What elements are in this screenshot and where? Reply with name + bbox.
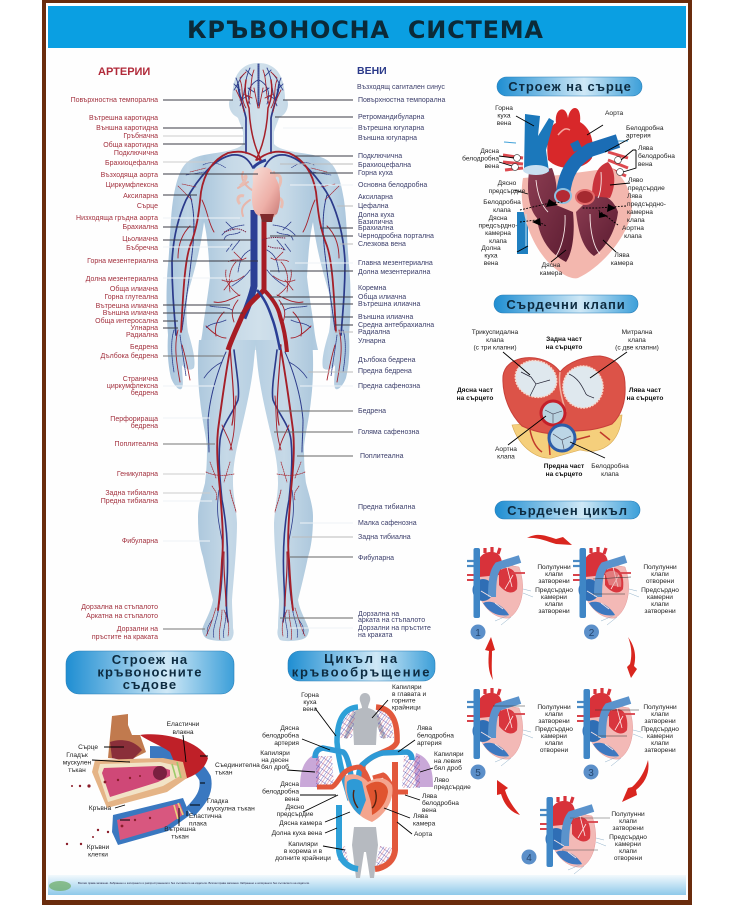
vein labels: Аксиларна [358, 194, 393, 201]
vein labels: Брахиоцефална [358, 162, 411, 169]
vein labels: Коремна [358, 285, 386, 292]
vein labels: Цефална [358, 203, 389, 210]
heading pill: Строеж на [112, 652, 188, 667]
vessel labels: Гладък [66, 752, 88, 759]
heart labels: Дясна [480, 148, 499, 155]
heart labels: белодробна [638, 152, 675, 160]
heart labels: Лява [614, 252, 630, 259]
vessel labels: Съединителна [215, 762, 260, 769]
artery labels: Обща илиачна [110, 285, 158, 293]
pulmonary veins [317, 767, 370, 787]
heart labels: Дясна [489, 215, 508, 222]
cycle labels: клапи [651, 740, 669, 747]
artery labels: Низходяща гръдна аорта [76, 215, 158, 222]
heart labels: предсърдие [628, 185, 665, 192]
heart labels: камера [611, 260, 633, 267]
circulation labels: предсърдие [434, 784, 471, 791]
valves labels: Митрална [622, 329, 653, 336]
valves labels: Дясна част [457, 387, 494, 394]
vessel labels: Гладка [207, 798, 229, 805]
artery labels: Аркатна на стъпалото [86, 613, 158, 620]
vein labels: Бедрена [358, 408, 386, 415]
heart labels: куха [484, 252, 498, 260]
vein labels: Голяма сафенозна [358, 429, 419, 436]
callout lines [287, 700, 433, 850]
heart labels: куха [497, 112, 511, 120]
vein labels: Долна мезентериална [358, 269, 430, 276]
callout lines [92, 735, 208, 826]
vein labels: Дорзални на пръстите [358, 625, 431, 632]
callout lines [499, 116, 636, 262]
heart cross-section [503, 108, 632, 278]
circulation labels: артерия [274, 740, 299, 747]
title band [48, 6, 686, 48]
lower figure [352, 827, 378, 878]
heading pill [288, 651, 435, 681]
cycle labels: отворени [646, 578, 674, 585]
heading pill [66, 651, 234, 694]
vein labels: Външна югуларна [358, 135, 417, 142]
artery labels: Бъбречна [126, 244, 158, 252]
artery labels: Брахиална [122, 224, 158, 231]
cycle labels: камерни [541, 594, 567, 601]
heart labels: Белодробна [626, 124, 664, 132]
cycle labels: Предсърдно [609, 834, 647, 841]
circulation labels: вена [422, 807, 437, 814]
vein labels: Предна тибиална [358, 503, 415, 511]
human body figure [163, 63, 353, 641]
cycle labels: клапи [545, 740, 563, 747]
artery labels: Циркумфлексна [106, 182, 158, 189]
heart in body [238, 167, 282, 222]
cycle labels: клапи [545, 601, 563, 608]
valves labels: Белодробна [591, 462, 629, 470]
heart labels: предсърдие [489, 188, 526, 195]
heart labels: клапа [624, 233, 642, 240]
vein labels: Главна мезентериална [358, 260, 433, 267]
vessel labels: плака [189, 820, 207, 828]
vessel labels: Вътрешна [164, 826, 196, 833]
stage numbers [470, 624, 599, 864]
cycle labels: затворени [612, 825, 644, 832]
artery labels: Външна каротидна [96, 125, 158, 132]
vein labels: Възходящ сагитален синус [357, 84, 445, 91]
vein labels: Основна белодробна [358, 181, 427, 189]
heart stage 3 [577, 688, 643, 766]
heart labels: клапа [489, 238, 507, 245]
vein labels: Предна бедрена [358, 367, 412, 375]
vein labels: Дълбока бедрена [358, 356, 416, 364]
cycle labels: клапи [651, 571, 669, 578]
circulation labels: Капиляри [260, 750, 290, 757]
artery labels: Аксиларна [123, 193, 158, 200]
artery labels: Перфорираща [110, 416, 158, 423]
vessel labels: мускулен [63, 760, 92, 766]
capillary meshes [338, 708, 356, 738]
heart labels: Белодробна [483, 198, 521, 206]
artery labels: Предна тибиална [101, 497, 158, 505]
panel: blood vessel structure [63, 651, 260, 858]
heart labels: Аорта [605, 110, 624, 117]
cycle labels: клапи [619, 818, 637, 825]
cycle labels: Полулунни [643, 704, 677, 711]
panel: heart structure [462, 77, 675, 278]
cycle labels: Полулунни [537, 564, 571, 571]
valves labels: на сърцето [546, 471, 582, 478]
cycle labels: клапи [651, 711, 669, 718]
circulation labels: в корема и в [284, 848, 323, 855]
vessels: upper body [172, 64, 345, 382]
vessel labels [63, 721, 260, 858]
vein labels: Обща илиачна [358, 293, 406, 301]
heart labels [462, 105, 675, 277]
cycle labels: затворени [538, 608, 570, 615]
heart stage 1 [467, 547, 533, 625]
circulation diagram [300, 693, 433, 878]
heading pill [497, 77, 642, 96]
artery labels [71, 97, 158, 641]
circulation labels: Капиляри [392, 684, 422, 691]
valves labels: клапа [601, 471, 619, 478]
artery labels: Дорзални на [117, 626, 158, 633]
cycle labels: отворени [540, 747, 568, 754]
circulation labels: вена [303, 706, 318, 713]
inferior vena cava and aorta [224, 160, 287, 352]
circulation labels: белодробна [417, 732, 454, 740]
valves drawing [503, 355, 625, 458]
cycle labels: клапи [651, 601, 669, 608]
artery labels: циркумфлексна [107, 383, 158, 390]
circulation labels: Лява [422, 793, 437, 800]
artery labels: пръстите на краката [92, 634, 158, 641]
heart [344, 774, 393, 822]
stage numbers: 3 [588, 768, 594, 779]
vein labels: Подключична [358, 153, 402, 160]
vein labels: Задна тибиална [358, 533, 411, 541]
circulation labels: Лява [417, 725, 432, 732]
artery labels: Вътрешна илиачна [96, 303, 158, 310]
heart labels: предсърдно- [479, 223, 517, 230]
vein labels: Ретромандибуларна [358, 113, 425, 121]
artery labels: Геникуларна [117, 471, 158, 478]
artery labels: Фибуларна [122, 537, 158, 545]
valves labels: Задна част [546, 336, 583, 343]
heading pill: кръвообръщение [292, 664, 431, 680]
vessel labels: клетки [88, 852, 108, 858]
cycle labels: камерни [647, 594, 673, 601]
heart labels: Долна [481, 245, 501, 252]
valves labels: на сърцето [457, 395, 493, 402]
heart labels: Ляво [628, 177, 643, 184]
artery labels: Дорзална на стъпалото [81, 604, 158, 611]
artery labels: Дълбока бедрена [101, 352, 158, 360]
cycle labels: затворени [538, 718, 570, 725]
stage numbers: 4 [526, 853, 532, 864]
cycle labels: камерни [541, 733, 567, 740]
artery labels: Цьолиачна [122, 236, 158, 243]
circulation labels: Горна [301, 692, 319, 699]
valves labels: клапа [497, 454, 515, 460]
circulation labels: Дясна [280, 725, 299, 732]
heart labels: Лява [638, 145, 653, 152]
vein labels: арката на стъпалото [358, 617, 425, 624]
vessel labels: Кръвни [87, 844, 110, 851]
heart stage 2 [573, 547, 639, 625]
cycle labels: Предсърдно [535, 587, 573, 594]
heading pill: съдове [123, 677, 177, 692]
circulation labels: белодробна [422, 799, 459, 807]
artery labels: бедрена [131, 389, 158, 397]
cycle labels: затворени [644, 608, 676, 615]
vessel labels: тъкан [68, 767, 86, 774]
circulation labels: Дясно [286, 804, 305, 811]
cycle labels: Полулунни [611, 811, 645, 818]
stage numbers: 5 [475, 768, 481, 779]
vessel labels: Еластични [167, 721, 200, 728]
valves labels: (с две клапни) [615, 344, 659, 352]
heart labels: клапа [493, 207, 511, 214]
vein labels: Външна илиачна [358, 314, 413, 321]
cycle labels: клапи [545, 711, 563, 718]
vessel labels: мускулна тъкан [207, 806, 255, 812]
circulation labels: Дясна камера [279, 820, 322, 827]
cycle arrows [485, 535, 648, 815]
footer small print: Всички права запазени. Забранено е копирането и разпространението без съгласието на издателя. Всички права запазени. Забранено е копирането без съгласието на издателя. [78, 881, 310, 885]
heart labels: камера [540, 270, 562, 277]
heart stage 4 [540, 796, 610, 874]
heading pill: Сърдечни клапи [506, 297, 626, 312]
cycle labels: Полулунни [643, 564, 677, 571]
panel: heart valves [457, 295, 663, 478]
artery labels: Външна илиачна [103, 310, 158, 317]
circulation labels: куха [303, 699, 317, 706]
heading: arteries: АРТЕРИИ [98, 66, 150, 78]
artery labels: Горна мезентериална [87, 258, 158, 265]
cycle labels: Предсърдно [641, 726, 679, 733]
title: КРЪВОНОСНА СИСТЕМА [187, 16, 543, 44]
vein labels [357, 84, 446, 639]
leader lines: veins [270, 100, 353, 628]
vein labels: Горна куха [358, 170, 393, 177]
valves labels: на сърцето [627, 395, 663, 402]
heading pill [495, 501, 640, 519]
artery labels: Горна глутеална [104, 294, 158, 301]
systemic arteries [363, 707, 397, 785]
vessel labels: тъкан [215, 770, 233, 776]
circulation labels: на левия [434, 758, 462, 765]
circulation labels: Дясна [280, 781, 299, 788]
artery labels: Гръбначна [123, 132, 158, 140]
circulation labels: долните крайници [275, 854, 331, 862]
artery labels: Радиална [126, 332, 158, 339]
circulation labels: Лява [413, 813, 428, 820]
circulation labels: Ляво [434, 777, 449, 784]
circulation labels: предсърдие [277, 811, 314, 818]
artery labels: Сърце [137, 203, 158, 210]
circulation labels: бял дроб [261, 763, 289, 771]
circulation labels: в главата и [392, 691, 427, 698]
heart labels: предсърдно- [627, 201, 666, 208]
heading pill [494, 295, 638, 313]
heart labels: Лява [627, 193, 642, 200]
artery labels: Улнарна [131, 325, 158, 332]
vein labels: Слезкова вена [358, 241, 406, 248]
cycle labels [535, 564, 679, 862]
circulation labels: крайници [392, 703, 421, 711]
circulation labels [260, 684, 471, 862]
vein labels: Дорзална на [358, 611, 399, 618]
vein labels: Брахиална [358, 225, 394, 232]
artery and vein drawing [66, 714, 208, 845]
artery labels: Повърхностна темпорална [71, 97, 158, 104]
circulation labels: белодробна [262, 732, 299, 740]
heart labels: вена [638, 161, 653, 168]
heading: veins: ВЕНИ [357, 65, 387, 77]
valves labels: Предна част [544, 463, 585, 470]
cycle labels: затворени [644, 747, 676, 754]
body silhouette [166, 63, 350, 641]
vein labels: Средна антебрахиална [358, 321, 434, 329]
cycle labels: клапи [619, 848, 637, 855]
pulmonary arteries [315, 748, 353, 798]
upper figure [344, 693, 386, 745]
artery labels: бедрена [131, 422, 158, 430]
vessel labels: Сърце [78, 744, 98, 751]
circulation labels: Аорта [414, 831, 433, 838]
artery labels: Обща каротидна [103, 141, 158, 149]
artery labels: Бедрена [130, 344, 158, 351]
heart labels: камерна [485, 230, 511, 237]
vein labels: Базилична [358, 219, 393, 226]
vessel labels: Кръвна [89, 805, 112, 812]
cycle labels: камерни [615, 841, 641, 848]
heart labels: клапа [627, 217, 645, 224]
panel: cardiac cycle [467, 501, 679, 874]
heart labels: артерия [626, 132, 651, 140]
heading pill: Строеж на сърце [508, 79, 632, 94]
artery labels: Вътрешна каротидна [89, 115, 158, 122]
heart labels: Горна [495, 105, 513, 112]
heart labels: камерна [627, 209, 653, 216]
valves labels: на сърцето [546, 344, 582, 351]
vein labels: Улнарна [358, 338, 386, 345]
circulation labels: артерия [417, 740, 442, 747]
vein labels: Чернодробна портална [358, 232, 434, 240]
heading pill: Цикъл на [324, 651, 399, 666]
cycle labels: Полулунни [537, 704, 571, 711]
heart labels: Дясно [498, 180, 517, 187]
valves labels: клапа [628, 337, 646, 344]
heart labels: Аортна [622, 225, 644, 232]
vessel labels: тъкан [171, 834, 189, 840]
artery labels: Подключична [114, 150, 158, 157]
vein labels: Поплитеална [360, 453, 404, 460]
vessels: legs [204, 345, 307, 640]
cycle labels: затворени [538, 578, 570, 585]
artery labels: Поплитеална [115, 441, 158, 448]
valves labels: Аортна [495, 446, 517, 453]
heart labels: вена [497, 120, 512, 127]
circulation labels: вена [285, 796, 299, 803]
leader lines: arteries [163, 100, 258, 629]
vein labels: Долна куха [358, 212, 394, 219]
circulation labels: белодробна [262, 788, 299, 796]
artery labels: Долна мезентериална [86, 276, 158, 283]
valves labels: клапа [486, 337, 504, 344]
circulation labels: Капиляри [434, 751, 464, 758]
circulation labels: горните [392, 698, 416, 705]
vein labels: Фибуларна [358, 554, 394, 562]
circulation labels: камера [413, 820, 436, 828]
circulation labels: Долна куха вена [272, 830, 322, 837]
vessel labels: влакна [172, 729, 194, 736]
cycle labels: камерни [647, 733, 673, 740]
valves labels [457, 329, 663, 478]
cycle labels: клапи [545, 571, 563, 578]
vein labels: Вътрешна илиачна [358, 301, 421, 308]
heading pill: Сърдечен цикъл [507, 503, 628, 518]
artery labels: Брахиоцефална [105, 160, 158, 167]
heart labels: Дясна [542, 262, 561, 269]
vein labels: Предна сафенозна [358, 383, 420, 390]
cycle labels: Предсърдно [641, 587, 679, 594]
icon: publisher logo [49, 881, 71, 891]
heart labels: вена [484, 260, 499, 267]
heart stage 5 [467, 688, 533, 766]
artery labels: Задна тибиална [105, 489, 158, 497]
cycle labels: затворени [644, 718, 676, 725]
cycle labels: отворени [614, 855, 642, 862]
valves labels: Трикуспидална [472, 329, 519, 336]
cycle labels: Предсърдно [535, 726, 573, 733]
vessel labels: Еластична [189, 813, 222, 820]
heart labels: белодробна [462, 154, 499, 162]
panel: circulation cycle [260, 651, 471, 878]
vein labels: Малка сафенозна [358, 520, 417, 527]
circulation labels: на десен [261, 757, 289, 764]
artery labels: Обща интеросална [95, 317, 158, 325]
circulation labels: бял дроб [434, 764, 462, 772]
vein labels: Радиална [358, 329, 390, 336]
stage numbers: 1 [475, 628, 481, 639]
circulation labels: Капиляри [288, 841, 318, 848]
heart labels: вена [485, 163, 499, 170]
callout lines [503, 352, 627, 458]
footer band [48, 875, 686, 895]
stage numbers: 2 [589, 628, 595, 639]
vein labels: Повърхностна темпорална [358, 97, 446, 104]
heading pill: кръвоносните [97, 665, 203, 680]
lungs [300, 753, 320, 787]
vein labels: на краката [358, 632, 393, 639]
artery labels: Възходяща аорта [101, 172, 158, 179]
systemic veins [337, 707, 358, 800]
valves labels: Лява част [629, 387, 662, 394]
artery labels: Странична [123, 376, 158, 383]
vein labels: Вътрешна югуларна [358, 125, 424, 132]
valves labels: (с три клапни) [473, 344, 517, 352]
